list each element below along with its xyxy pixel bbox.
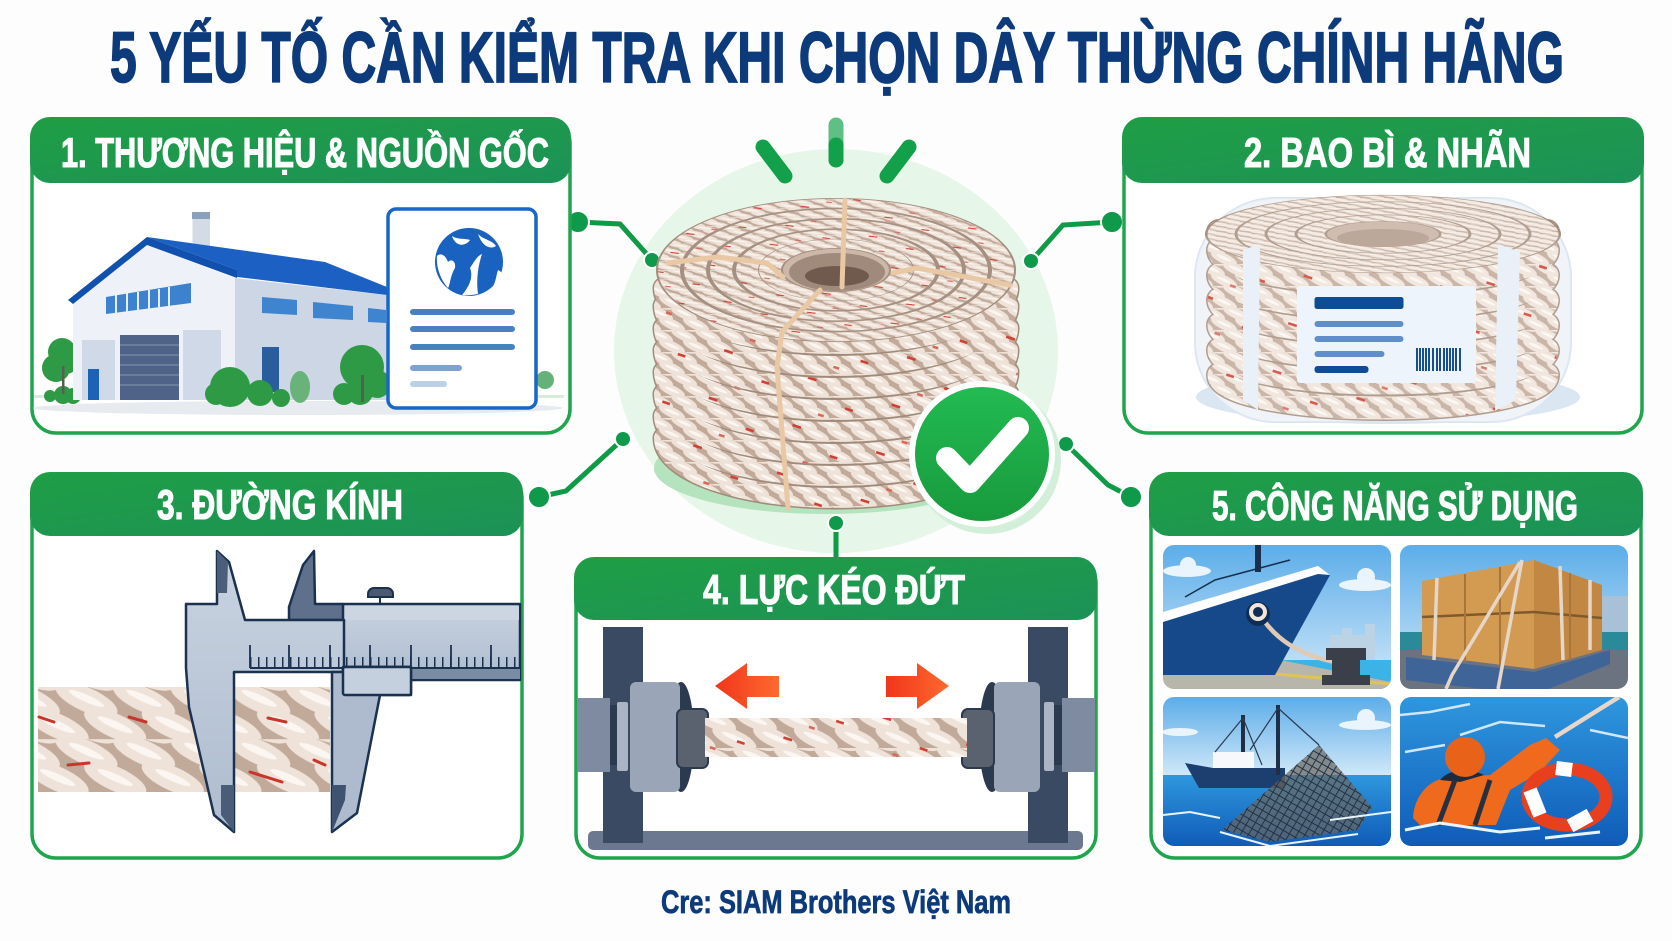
panel 3: diameter [30, 472, 523, 858]
arrow: pull left [715, 663, 779, 709]
central rope coil [654, 198, 1016, 514]
test machine [577, 627, 1095, 850]
connector 4 [828, 515, 844, 560]
tile: ship mooring [1163, 545, 1391, 689]
arrow: pull right [886, 663, 949, 709]
connector 5 [1058, 436, 1142, 508]
tile: water rescue [1400, 697, 1628, 846]
label sticker [1297, 286, 1476, 383]
rope sample [38, 687, 330, 792]
panel 5: applications [1149, 472, 1643, 858]
icon: caliper [186, 551, 520, 832]
heading 3 [30, 472, 523, 536]
heading 2: 2. BAO BÌ & NHÃN [1244, 129, 1531, 176]
heading 1: 1. THƯƠNG HIỆU & NGUỒN GỐC [61, 128, 549, 176]
heading 5 [1149, 472, 1643, 536]
highlight rays [763, 125, 909, 176]
illustration: certificate document [388, 209, 536, 408]
connector 1 [567, 211, 660, 268]
illustration: factory [33, 212, 564, 415]
panel 2: packaging and label [1122, 117, 1644, 433]
heading 4: 4. LỰC KÉO ĐỨT [703, 565, 965, 613]
heading 2 [1122, 117, 1644, 183]
rope under tension [705, 718, 967, 757]
heading 3: 3. ĐƯỜNG KÍNH [157, 480, 403, 528]
check badge [909, 381, 1061, 534]
panel 1: brand and origin [30, 117, 571, 433]
panel 4: breaking force [574, 557, 1097, 858]
illustration: wrapped coil [1195, 196, 1580, 424]
credit line: Cre: SIAM Brothers Việt Nam [661, 884, 1011, 920]
connector 3 [528, 431, 631, 508]
connector 2 [1023, 211, 1123, 269]
tile: cargo lashing [1400, 545, 1628, 695]
heading 4 [574, 557, 1097, 620]
heading 1 [30, 117, 571, 183]
tile: fishing boat and net [1162, 697, 1391, 846]
central halo [614, 149, 1058, 553]
